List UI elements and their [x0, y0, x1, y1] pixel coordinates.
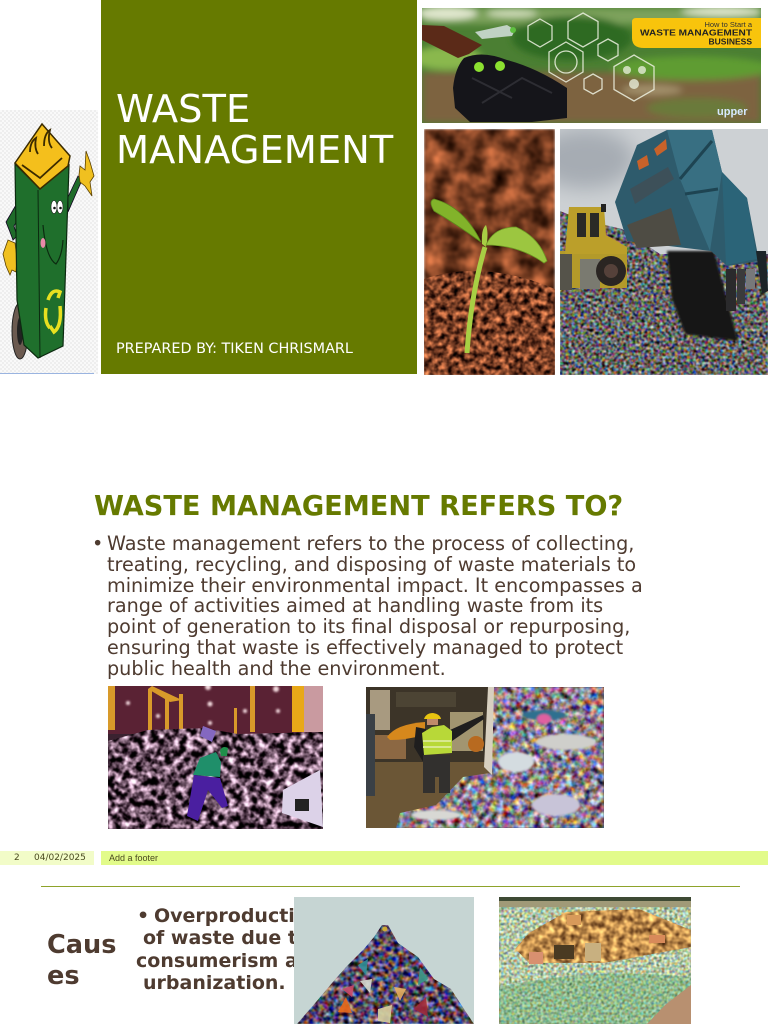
footer text	[101, 851, 768, 865]
footer page number and date: 04/02/2025	[34, 853, 86, 863]
title: WASTE	[116, 87, 250, 132]
footer bar	[0, 851, 768, 865]
image: pile of discarded clothes	[294, 897, 474, 1024]
footer page number and date	[0, 851, 94, 865]
image: crushed cans and bottles	[499, 897, 691, 1024]
image: waste management business banner: upper	[717, 106, 748, 118]
title	[116, 87, 394, 173]
presenter credit: PREPARED BY: TIKEN CHRISMARL	[116, 341, 353, 357]
text block: definition: public health and the environment.	[107, 657, 446, 680]
footer page number and date: 2	[14, 853, 20, 863]
image: worker with vest and plastic waste	[366, 687, 604, 828]
image: waste management business banner	[422, 8, 761, 123]
text block: definition: Waste management refers to the process of collecting,	[107, 532, 634, 555]
text block: causes bullet: of waste due to	[143, 927, 310, 949]
image: worker in e-waste warehouse	[108, 686, 323, 829]
text block: causes bullet: consumerism and	[136, 950, 325, 972]
text block: causes bullet	[136, 905, 325, 994]
text block: causes bullet: urbanization.	[143, 972, 286, 994]
image: waste management business banner: How to Start a	[704, 20, 753, 29]
text block: definition: •	[92, 532, 103, 555]
text block: definition: range of activities aimed at handling waste from its	[107, 594, 603, 617]
text block: definition: ensuring that waste is effectively managed to protect	[107, 636, 623, 659]
icon: cartoon recycling bin	[0, 110, 98, 374]
heading: causes: Caus	[47, 930, 117, 960]
text block: causes bullet: Overproduction	[154, 905, 321, 927]
title: MANAGEMENT	[116, 128, 393, 173]
text block: causes bullet: •	[137, 905, 149, 927]
heading: causes	[47, 930, 117, 991]
image: waste management business banner: WASTE MANAGEMENT	[640, 28, 753, 38]
text block: definition: point of generation to its final disposal or repurposing,	[107, 615, 630, 638]
footer text: Add a footer	[109, 853, 158, 863]
heading: causes: es	[47, 961, 80, 991]
text block: definition	[92, 532, 643, 680]
image: waste management business banner: BUSINESS	[709, 36, 752, 46]
image: garbage truck dumping on landfill	[560, 129, 768, 375]
text block: definition: treating, recycling, and disposing of waste materials to	[107, 553, 636, 576]
image: seedling in soil	[424, 129, 555, 375]
heading: waste management refers to: WASTE MANAGEMENT REFERS TO?	[94, 491, 623, 522]
text block: definition: minimize their environmental impact. It encompasses a	[107, 574, 643, 597]
panel: green title block	[101, 0, 417, 374]
